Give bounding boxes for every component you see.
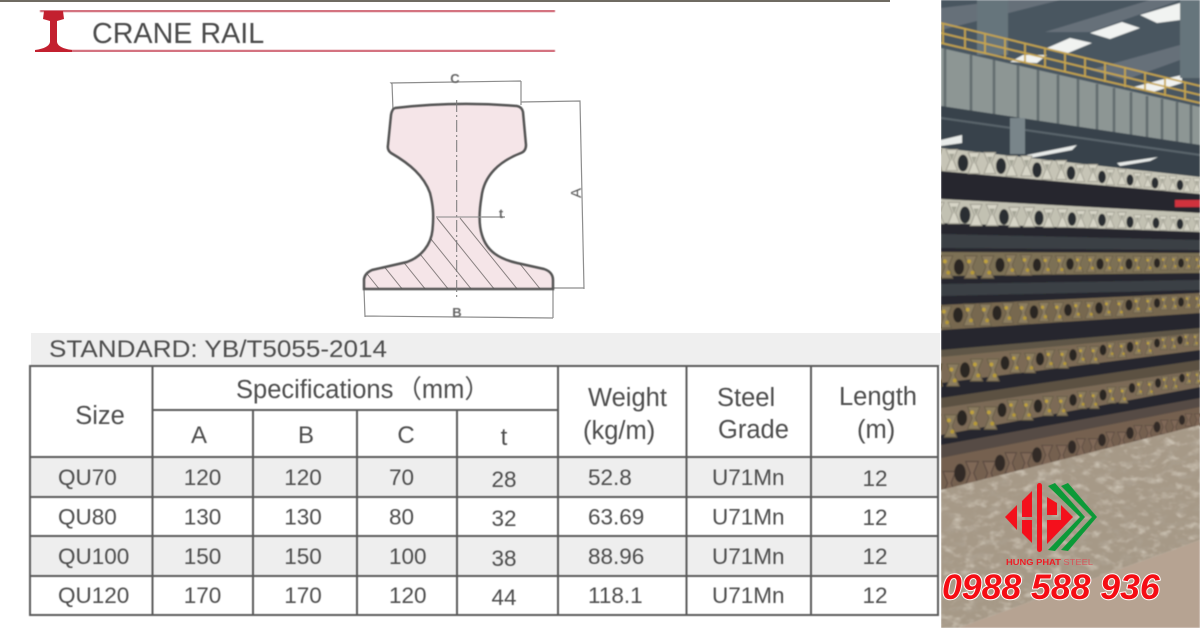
logo mark red <box>1005 491 1073 544</box>
hatching <box>367 218 540 288</box>
under beam column <box>1010 118 1025 154</box>
header: crane rail <box>35 11 555 52</box>
label A: A <box>568 188 585 198</box>
under beam lights <box>941 135 1158 166</box>
row QU70: U71Mn <box>712 465 785 490</box>
top image strip <box>0 0 890 2</box>
row QU80: 32 <box>491 506 517 531</box>
row QU80: 80 <box>389 504 414 530</box>
icon: rail profile <box>35 11 72 52</box>
label B: B <box>452 305 462 320</box>
row QU120: 170 <box>184 583 221 608</box>
row QU70 <box>58 465 888 492</box>
row QU80: 130 <box>284 504 322 530</box>
row QU120: 170 <box>284 583 322 608</box>
row QU120: U71Mn <box>712 583 785 608</box>
phone number: 0988 588 936 <box>942 567 1160 607</box>
under beam structure <box>941 118 1200 155</box>
row 5 <box>920 328 1200 386</box>
yellow railing <box>941 23 1200 103</box>
title: CRANE RAIL <box>92 18 264 50</box>
table headers: Length <box>839 383 917 411</box>
shaded rows <box>31 457 938 576</box>
row 1 <box>920 148 1200 194</box>
logo text: HUNG PHAT STEEL <box>1006 558 1094 567</box>
rail profile fill <box>364 104 553 289</box>
table headers: (m) <box>857 416 895 444</box>
row QU80: U71Mn <box>712 504 785 530</box>
table headers: C <box>397 422 415 449</box>
gravel ground <box>941 425 1200 628</box>
concrete floor <box>958 540 1200 628</box>
row QU70: 120 <box>284 465 322 490</box>
logo: Hung Phat Steel <box>1005 483 1097 567</box>
section line t <box>436 216 482 218</box>
table headers: B <box>298 422 314 449</box>
row QU100: 150 <box>184 544 221 569</box>
table headers: (kg/m) <box>583 417 655 445</box>
centre line <box>456 100 458 297</box>
dimension lines <box>364 81 584 318</box>
row QU70: 120 <box>184 465 221 490</box>
row QU100 <box>58 544 888 571</box>
row QU70: 12 <box>862 466 888 491</box>
row QU100: U71Mn <box>712 544 785 569</box>
table headers: Grade <box>718 416 789 444</box>
specification table <box>30 366 938 615</box>
row QU80: 63.69 <box>588 504 644 530</box>
red patch <box>1175 200 1200 207</box>
row QU100: 38 <box>491 546 517 571</box>
row QU120: 12 <box>862 583 888 608</box>
row QU120: 118.1 <box>588 583 643 608</box>
row QU120: QU120 <box>58 583 129 608</box>
logo chevrons <box>1048 483 1097 551</box>
table headers: Specifications（mm） <box>236 376 490 404</box>
row QU70: 28 <box>491 467 517 492</box>
row QU70: QU70 <box>58 465 117 490</box>
row QU120: 120 <box>389 583 427 608</box>
standard text: STANDARD: YB/T5055-2014 <box>49 336 387 363</box>
table grid <box>30 366 938 615</box>
gravel texture <box>941 425 1200 628</box>
rail outline <box>364 104 553 289</box>
ceiling <box>941 0 1200 150</box>
table headers: A <box>191 422 207 449</box>
row QU70: 70 <box>389 465 414 490</box>
row 3 <box>913 252 1200 278</box>
photo: stacked crane rails in a warehouse <box>913 0 1200 628</box>
row QU100: QU100 <box>58 544 129 569</box>
rail cross-section diagram <box>362 73 585 319</box>
table headers <box>75 376 917 451</box>
lighter rail sides <box>941 234 1200 296</box>
label t: t <box>499 206 504 221</box>
columns <box>977 0 1200 78</box>
ceiling lights <box>1010 3 1182 92</box>
row 7 <box>941 398 1200 490</box>
table headers: Steel <box>717 384 775 412</box>
row QU100: 88.96 <box>588 544 644 569</box>
steel beam <box>941 48 1200 145</box>
row QU80: 130 <box>184 504 221 530</box>
row QU80: QU80 <box>58 504 117 530</box>
table headers: Size <box>75 402 125 430</box>
row QU100: 150 <box>284 544 322 569</box>
row QU100: 12 <box>862 544 888 569</box>
row QU100: 100 <box>389 544 427 569</box>
label C: C <box>450 71 460 86</box>
header rules <box>40 11 555 51</box>
row QU120: 44 <box>491 585 517 610</box>
row QU80 <box>58 504 888 531</box>
rack backdrop <box>941 170 1200 446</box>
table headers: Weight <box>588 384 667 412</box>
table headers: t <box>501 424 508 451</box>
row 6 <box>917 360 1200 437</box>
row QU80: 12 <box>862 505 888 530</box>
area under beam <box>941 106 1200 185</box>
row QU70: 52.8 <box>588 465 632 490</box>
band background <box>31 333 940 366</box>
logo centre bar <box>1037 483 1042 552</box>
row 4 <box>913 293 1200 330</box>
row QU120 <box>58 583 888 610</box>
standard band <box>31 333 940 366</box>
beam stiffeners <box>945 49 1191 144</box>
row 2 <box>922 199 1200 232</box>
ceiling beams <box>941 0 1180 80</box>
